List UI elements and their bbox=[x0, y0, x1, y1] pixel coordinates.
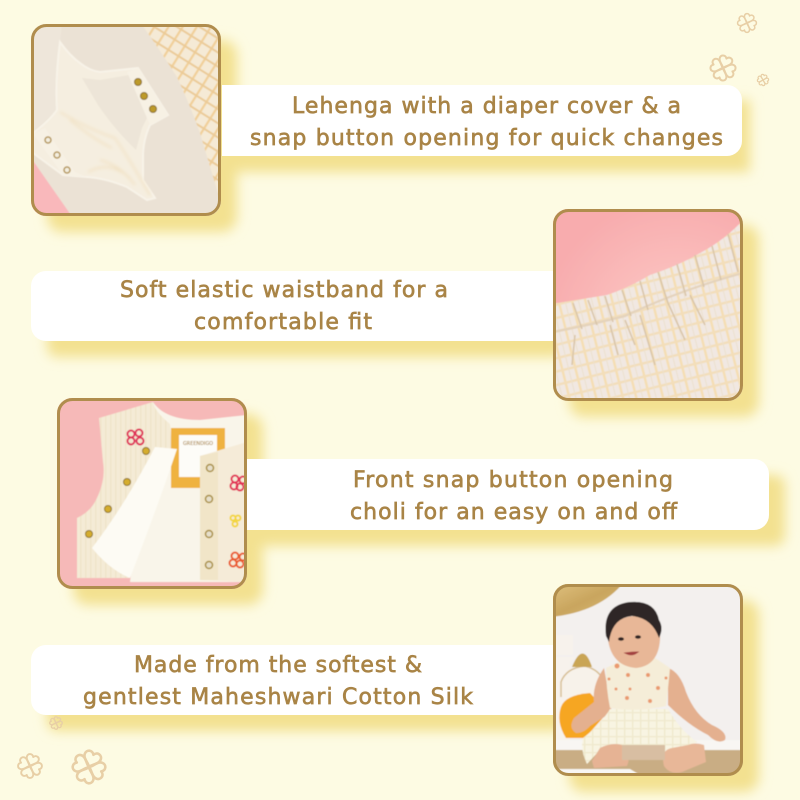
icon: clover small right bbox=[756, 73, 770, 87]
photo frame bbox=[554, 210, 742, 400]
clothing label: GREENDIGO bbox=[183, 441, 214, 447]
panel: elastic waistband bbox=[31, 207, 759, 417]
baby skirt bbox=[582, 709, 697, 764]
panel: lehenga diaper cover bbox=[29, 22, 750, 232]
icon: red embroidered flower bbox=[128, 430, 144, 444]
photo: diaper cover bbox=[29, 22, 223, 218]
icon: clover upper right large bbox=[708, 53, 738, 83]
text: choli caption: Front snap button opening bbox=[353, 468, 673, 493]
text: waistband caption: Soft elastic waistband for a bbox=[120, 278, 448, 303]
icon: clover bottom left bbox=[15, 751, 45, 781]
baby head bbox=[608, 616, 660, 668]
drop shadow bbox=[47, 40, 750, 232]
candle and stand bbox=[553, 635, 576, 740]
lantern and marigolds bbox=[559, 654, 608, 738]
gold drape bbox=[553, 584, 620, 617]
floor and mat bbox=[551, 740, 745, 752]
icon: pink embroidered flower bbox=[230, 476, 246, 490]
text banner bbox=[31, 645, 553, 715]
photo: choli bbox=[55, 396, 249, 591]
text: choli caption bbox=[350, 468, 678, 525]
photo frame bbox=[58, 400, 246, 588]
baby choli bbox=[606, 658, 670, 710]
folded flap bbox=[92, 447, 177, 578]
icon: clover bottom large bbox=[69, 747, 109, 787]
icon: clover small bottom left bbox=[48, 715, 64, 731]
photo frame bbox=[32, 26, 220, 214]
panel: maheshwari cotton silk bbox=[31, 582, 759, 792]
photo frame bbox=[554, 586, 742, 774]
left choli panel bbox=[77, 402, 172, 578]
lining bbox=[130, 402, 247, 582]
drop shadow bbox=[47, 600, 759, 792]
photo: waistband bbox=[551, 207, 745, 403]
text: fabric caption: Made from the softest & bbox=[134, 653, 422, 678]
text banner bbox=[247, 459, 769, 530]
text: fabric caption: gentlest Maheshwari Cotton Silk bbox=[83, 685, 473, 710]
text banner bbox=[222, 85, 742, 156]
text: waistband caption bbox=[120, 278, 448, 335]
baby legs bbox=[592, 744, 629, 768]
text: waistband caption: comfortable fit bbox=[194, 310, 372, 335]
text: diaper cover caption: Lehenga with a diaper cover & a bbox=[292, 94, 681, 119]
drop shadow bbox=[73, 414, 785, 605]
icon: orange embroidered flower bbox=[230, 552, 246, 568]
text: choli caption: choli for an easy on and off bbox=[350, 500, 678, 525]
text: diaper cover caption: snap button opening for quick changes bbox=[250, 126, 723, 151]
text: fabric caption bbox=[83, 653, 473, 710]
text banner bbox=[31, 271, 553, 341]
baby arms bbox=[571, 668, 725, 742]
right choli panel bbox=[206, 443, 244, 582]
photo: baby in outfit bbox=[551, 582, 745, 778]
drop shadow bbox=[47, 225, 759, 417]
panel: choli snap button opening bbox=[55, 396, 785, 605]
clothing label bbox=[171, 428, 225, 488]
text: diaper cover caption bbox=[250, 94, 723, 151]
icon: clover top right bbox=[735, 11, 759, 35]
icon: yellow embroidered flower bbox=[230, 516, 240, 526]
